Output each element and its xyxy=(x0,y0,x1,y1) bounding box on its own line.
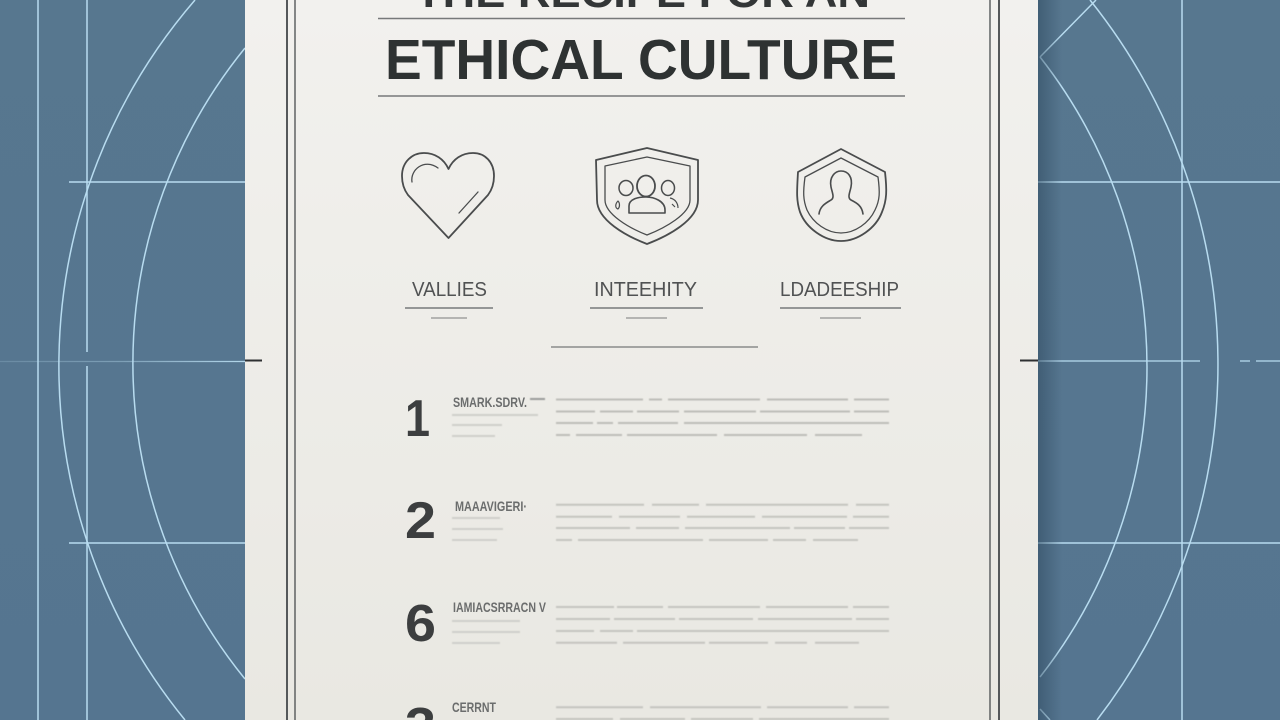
pillar: leadership label: LDADEESHIP xyxy=(780,279,899,301)
step 2 xyxy=(405,492,889,550)
pillar: leadership label xyxy=(780,279,901,318)
paper sheet xyxy=(245,0,1038,720)
step 4 xyxy=(405,698,889,720)
step 3 xyxy=(405,595,889,653)
step 3 number: 6 xyxy=(405,595,436,653)
blueprint lines: right side xyxy=(1038,0,1280,720)
pillar: values label xyxy=(405,279,493,318)
step 4 text lines xyxy=(556,707,889,719)
icon: shield with group xyxy=(596,148,698,244)
icon: heart xyxy=(402,153,494,238)
blueprint lines: left side xyxy=(0,0,245,720)
paper shadow xyxy=(1038,0,1062,720)
title line two: ETHICAL CULTURE xyxy=(385,28,897,92)
double frame xyxy=(287,0,999,720)
step 4 heading: CERRNT xyxy=(452,699,496,715)
step 1 heading: SMARK.SDRV. xyxy=(453,394,527,410)
registration ticks xyxy=(245,360,1038,362)
icon: leader badge xyxy=(797,149,886,241)
pillar: values label: VALLIES xyxy=(412,279,487,301)
step 1 xyxy=(405,390,889,448)
title block xyxy=(378,0,905,96)
step 3 heading: IAMIACSRRACN V xyxy=(453,599,547,615)
step 1 number: 1 xyxy=(405,390,430,448)
pillar: integrity label: INTEEHITY xyxy=(594,279,697,301)
step 2 text lines xyxy=(452,505,889,540)
step 2 number: 2 xyxy=(405,492,436,550)
pillar: integrity label xyxy=(590,279,703,318)
step 3 text lines xyxy=(452,607,889,643)
step 1 text lines xyxy=(452,399,889,436)
step 2 heading: MAAAVIGERI· xyxy=(455,498,527,514)
